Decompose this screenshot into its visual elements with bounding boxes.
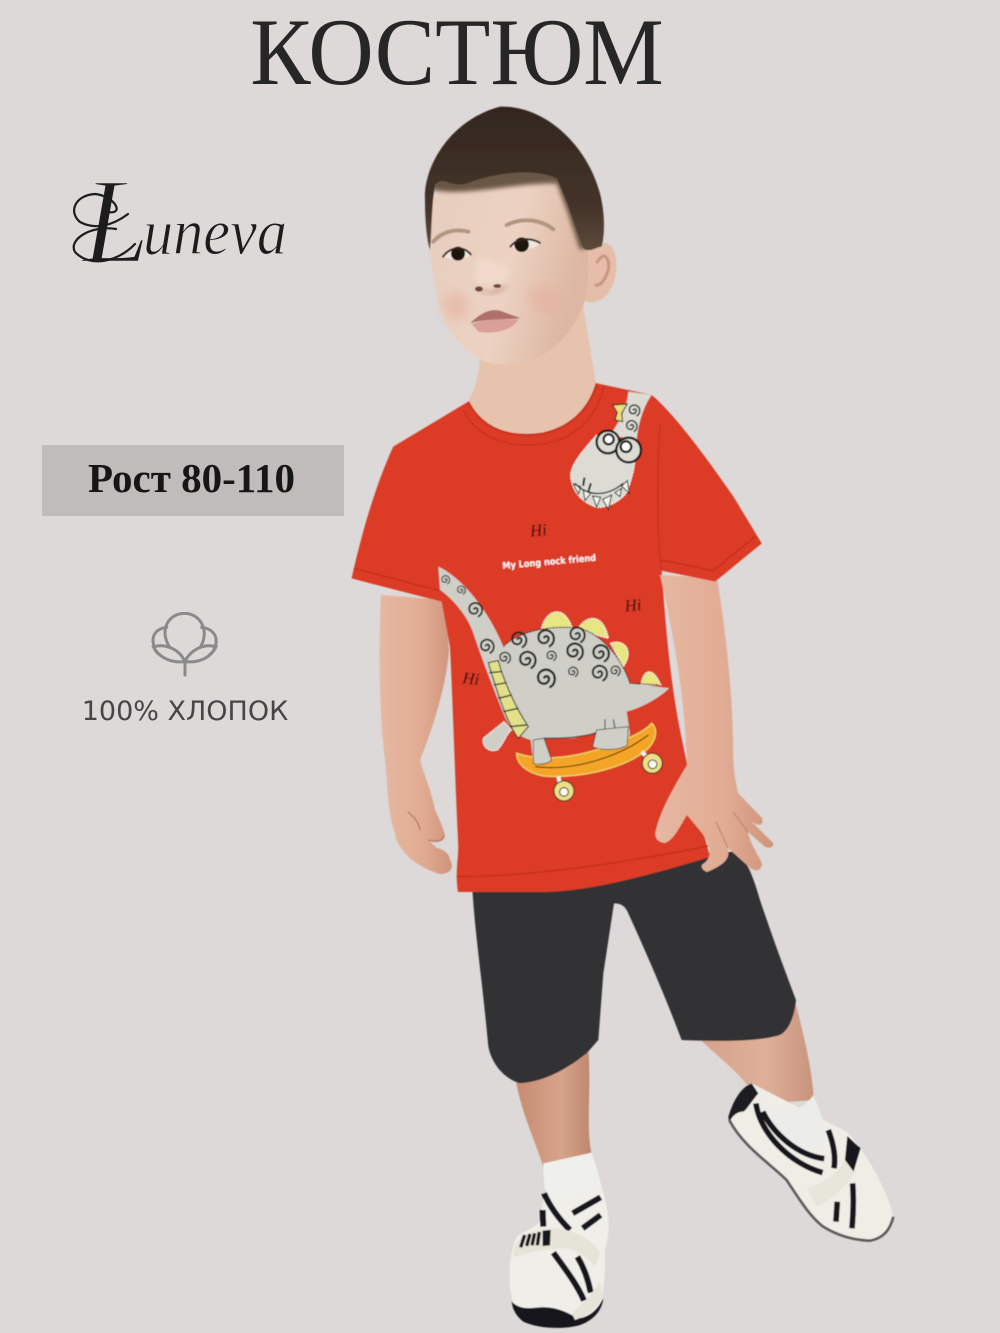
arm <box>380 595 452 874</box>
barcode <box>521 1231 546 1247</box>
right eye <box>510 237 541 252</box>
dino plates <box>542 612 661 685</box>
sock <box>758 1095 826 1149</box>
belly ribs <box>489 672 527 727</box>
dino body <box>438 567 669 764</box>
upper dino neck spirals <box>627 405 640 431</box>
hi texts <box>461 520 643 689</box>
skateboard <box>517 723 662 801</box>
dino leg lines <box>544 719 618 745</box>
upper <box>510 1165 609 1326</box>
left leg <box>515 1045 592 1166</box>
stripes <box>543 1193 601 1301</box>
shorts <box>472 852 796 1083</box>
upper dino teeth <box>573 481 629 509</box>
logo initial: L <box>80 154 150 289</box>
dino belly stripe <box>488 661 528 738</box>
logo word: uneva <box>143 196 287 269</box>
eyebrows <box>433 220 553 242</box>
hair <box>425 107 604 250</box>
barcode strap <box>845 1136 861 1173</box>
t-shirt <box>352 383 762 892</box>
dino tail <box>483 722 512 751</box>
upper dino crest <box>613 404 627 422</box>
cheek blush <box>442 285 564 321</box>
size badge <box>42 445 344 516</box>
arm <box>655 575 773 872</box>
face <box>428 168 588 364</box>
strap <box>807 1160 855 1207</box>
left eye <box>443 247 471 261</box>
front wheel <box>554 781 574 801</box>
side band <box>572 1280 603 1320</box>
upper dino nostrils <box>583 478 591 491</box>
hi texts: Hi <box>461 668 480 689</box>
title: КОСТЮМ <box>250 0 664 105</box>
glasses <box>597 431 641 462</box>
logo swash <box>74 194 135 261</box>
cotton badge <box>82 612 288 727</box>
upper dino smile <box>575 483 623 493</box>
neck <box>465 300 600 455</box>
collar rib <box>468 383 597 435</box>
print caption: My Long nock friend <box>502 553 597 572</box>
mouth <box>470 310 521 333</box>
icon: cotton flower <box>151 612 218 676</box>
photo: boy <box>352 107 893 1328</box>
right leg <box>690 1005 814 1104</box>
heel patch <box>728 1083 758 1123</box>
nose <box>474 257 508 294</box>
dino front foot over board <box>533 738 552 764</box>
left sleeve <box>352 447 473 647</box>
thumb crease <box>408 812 444 841</box>
sole and upper <box>728 1083 893 1241</box>
right shoe <box>728 1083 893 1241</box>
wheel axles <box>558 752 647 783</box>
size badge: Рост 80-110 <box>88 455 295 501</box>
hem stitch <box>457 846 708 877</box>
brand logo: Luneva <box>74 154 287 289</box>
ear <box>583 243 616 302</box>
sole line <box>729 1120 893 1241</box>
t-shirt print <box>438 392 669 801</box>
toe cap <box>512 1298 603 1328</box>
spirals <box>442 576 620 687</box>
sleeve seam <box>658 423 662 571</box>
hi texts: Hi <box>528 520 548 541</box>
velcro strap <box>513 1228 600 1267</box>
sock <box>543 1153 601 1198</box>
sleeve hems <box>354 537 755 592</box>
shirt body <box>352 383 762 892</box>
right arm and hand <box>655 575 773 872</box>
hi texts: Hi <box>623 595 643 616</box>
right sleeve <box>647 395 762 582</box>
back wheel <box>642 753 662 773</box>
finger creases <box>716 812 748 848</box>
cotton label: 100% ХЛОПОК <box>82 696 288 727</box>
head <box>425 107 616 364</box>
hair fringe fade <box>432 167 597 250</box>
sleeves <box>352 395 762 647</box>
upper dino neck <box>610 392 652 440</box>
left shoe <box>510 1153 609 1328</box>
upper dino head <box>571 435 635 507</box>
stripes <box>756 1103 853 1228</box>
dino back line <box>503 627 660 685</box>
dino back foot over board <box>593 727 628 749</box>
left arm and hand <box>380 595 452 874</box>
